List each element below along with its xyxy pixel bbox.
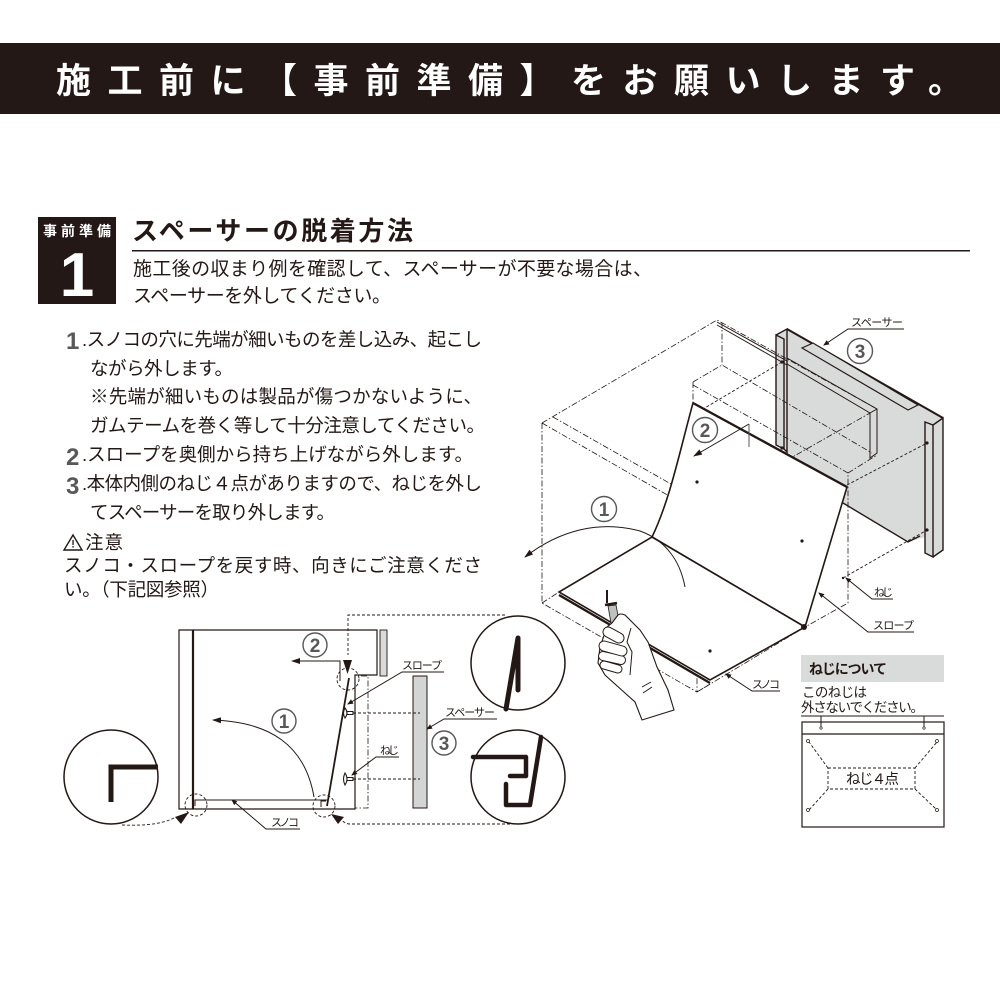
arrow 2 <box>694 424 749 456</box>
dashed connector arrows <box>122 615 510 825</box>
step badge: 事前準備 <box>43 223 111 239</box>
screw holes <box>695 360 929 653</box>
detail circle: corner <box>64 730 158 824</box>
numbered instructions: .スノコの穴に先端が細いものを差し込み、起こし <box>82 329 482 350</box>
note diagram <box>801 716 944 827</box>
part labels: スペーサー <box>445 706 495 719</box>
section heading: スペーサーの脱着方法 <box>132 216 413 246</box>
caution note: スノコ・スロープを戻す時、向きにご注意くださ <box>64 555 482 576</box>
cabinet outline <box>542 320 927 692</box>
screw note panel <box>801 655 944 827</box>
detail markers <box>185 668 359 817</box>
spacer panel <box>776 329 943 557</box>
slope panel <box>652 403 847 627</box>
step badge <box>38 217 116 310</box>
numbered instructions: 2 <box>66 444 79 471</box>
part labels <box>232 659 497 829</box>
note heading <box>801 655 944 682</box>
caution note <box>64 532 482 600</box>
detached spacer <box>413 676 427 808</box>
intro text: スペーサーを外してください。 <box>133 285 391 307</box>
part labels: スノコ <box>271 817 299 829</box>
header banner <box>0 43 1000 114</box>
numbered instructions: .スロープを奥側から持ち上げながら外します。 <box>82 444 473 465</box>
note heading: ねじについて <box>809 661 887 677</box>
step badge: 1 <box>60 241 94 310</box>
arrow 1 <box>213 720 314 797</box>
step numbers: 2 <box>310 636 320 657</box>
thick hinge edge <box>693 403 847 487</box>
part labels: ねじ <box>874 586 893 599</box>
isometric diagram <box>525 316 943 720</box>
note diagram: ねじ４点 <box>846 771 899 788</box>
numbered instructions: .本体内側のねじ４点がありますので、ねじを外し <box>82 473 482 494</box>
caution note: い。（下記図参照） <box>64 579 219 600</box>
slatted floor <box>559 537 807 683</box>
note text: 外さないでください。 <box>801 700 924 715</box>
step numbers: 2 <box>700 421 710 442</box>
arrow 2 <box>292 661 340 681</box>
numbered instructions: 3 <box>66 473 79 500</box>
part labels: スノコ <box>752 679 780 691</box>
step numbers <box>272 633 456 755</box>
screws <box>344 708 420 785</box>
detail circle: slope bottom <box>471 730 565 824</box>
step numbers: 3 <box>855 342 865 363</box>
header banner: 施工前に【事前準備】をお願いします。 <box>56 62 963 101</box>
step numbers <box>592 338 872 522</box>
numbered instructions <box>66 328 485 523</box>
numbered instructions: ながら外します。 <box>90 358 233 379</box>
note text: このねじは <box>802 685 867 700</box>
cabinet cross-section <box>179 630 387 809</box>
intro text <box>133 258 652 307</box>
numbered instructions: ガムテームを巻く等して十分注意してください。 <box>90 415 485 436</box>
section diagram <box>64 615 565 829</box>
step numbers: 3 <box>439 734 449 755</box>
part labels <box>726 316 914 691</box>
numbered instructions: てスペーサーを取り外します。 <box>90 502 335 523</box>
part labels: スロープ <box>402 659 442 672</box>
hand holding tool <box>598 590 674 720</box>
detail circle: slope top <box>471 616 565 710</box>
note text <box>801 685 924 715</box>
step numbers: 1 <box>599 500 610 521</box>
intro text: 施工後の収まり例を確認して、スペーサーが不要な場合は、 <box>133 258 652 280</box>
part labels: ねじ <box>380 744 399 757</box>
step numbers: 1 <box>279 712 290 733</box>
numbered instructions: ※先端が細いものは製品が傷つかないように、 <box>90 386 482 407</box>
part labels: スペーサー <box>851 316 903 329</box>
part labels: スロープ <box>873 619 914 632</box>
arrow 1 <box>525 527 685 587</box>
numbered instructions: 1 <box>66 328 79 355</box>
caution note: 注意 <box>85 532 123 553</box>
